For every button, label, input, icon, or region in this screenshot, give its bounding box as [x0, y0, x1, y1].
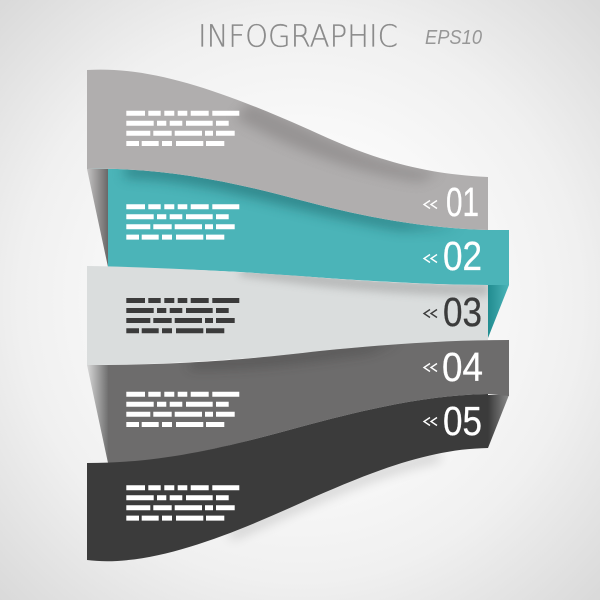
panel 05: dark band	[87, 394, 488, 561]
number 03: 03	[443, 289, 482, 335]
text placeholder lines	[126, 392, 239, 427]
number 05: 05	[443, 398, 482, 444]
panel 03: light grey band	[87, 266, 488, 365]
text placeholder lines	[126, 204, 239, 240]
subtitle: EPS10: EPS10	[425, 27, 482, 49]
number 01: 01	[446, 179, 479, 225]
drop shadow below bottom band	[230, 456, 440, 535]
chevrons	[424, 364, 437, 372]
chevrons	[424, 310, 437, 318]
panel 1 left fold	[87, 169, 108, 267]
panel 04: mid grey band	[108, 340, 509, 463]
panel 5 right fold	[488, 395, 509, 448]
chevrons	[424, 254, 437, 262]
chevrons	[424, 200, 437, 208]
text placeholder lines	[126, 111, 239, 146]
panel 3 right fold: teal	[488, 285, 509, 338]
panel 02: teal band	[87, 165, 509, 285]
chevrons	[424, 418, 437, 426]
text placeholder lines	[126, 298, 239, 333]
panel 01: grey band	[87, 70, 488, 230]
number 02: 02	[443, 233, 482, 279]
title: INFOGRAPHIC	[198, 20, 398, 54]
text placeholder lines	[126, 485, 239, 521]
panel 3 left fold: grey	[87, 365, 108, 463]
number 04: 04	[442, 344, 483, 390]
